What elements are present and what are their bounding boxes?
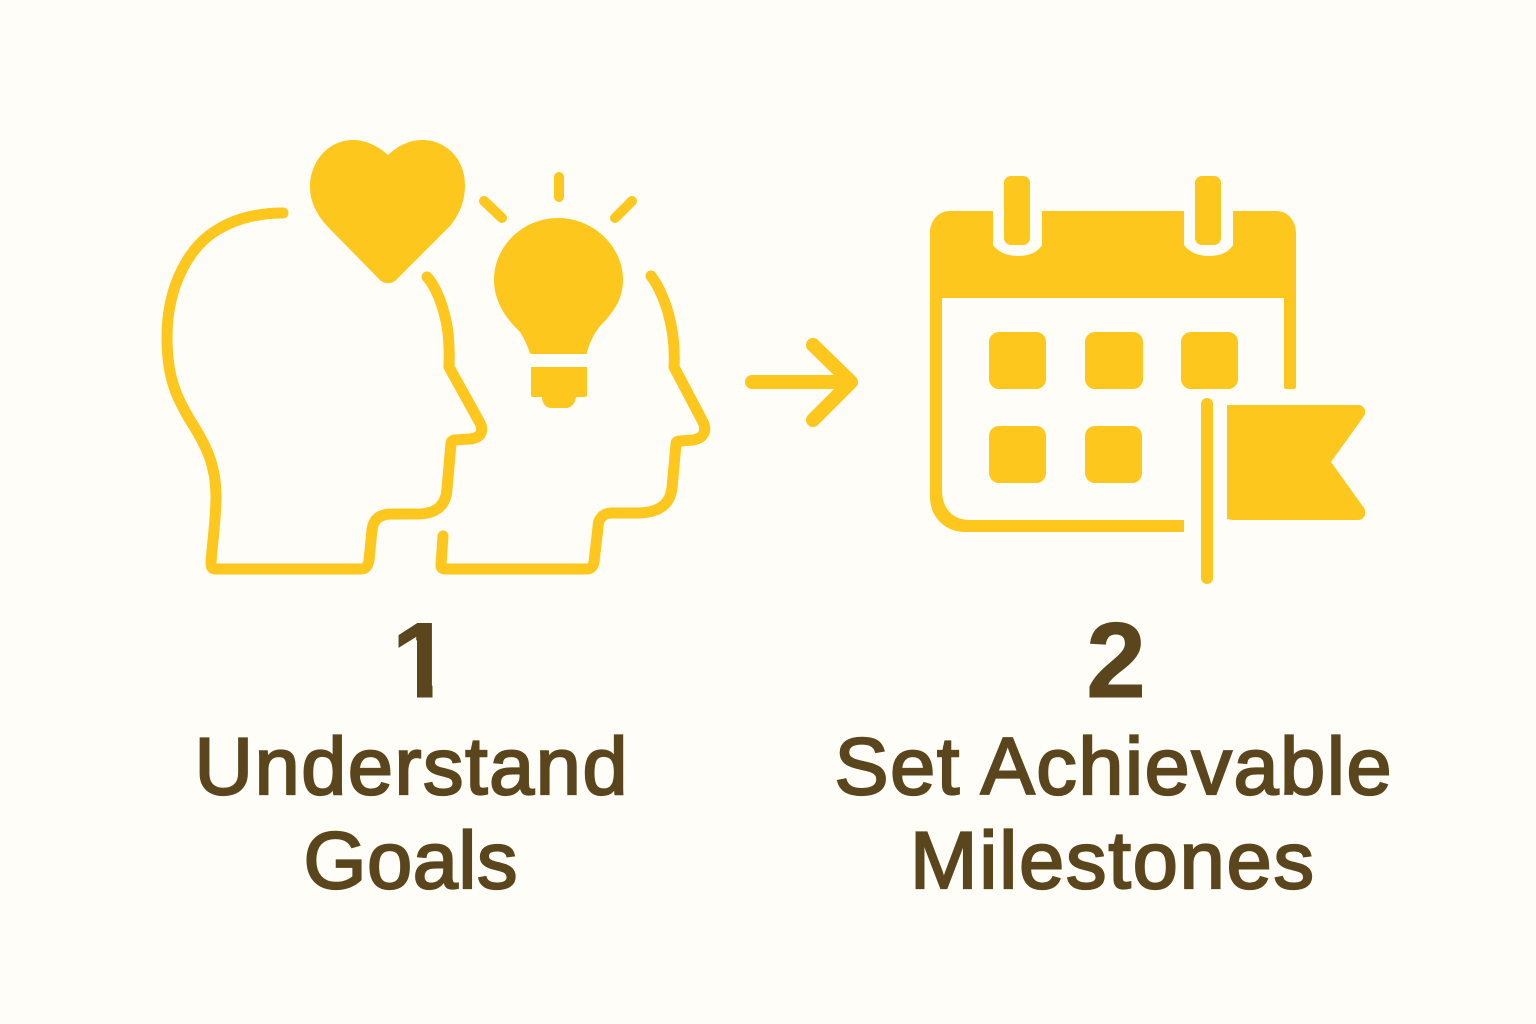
icon: second head outline [441,276,705,569]
calendar binder rings [1004,176,1221,245]
icon: light bulb [494,218,623,408]
step 1 label: Understand [194,722,628,812]
step 2 number: 2 [1086,600,1146,720]
icon: flag [1201,398,1365,584]
step 1 label: Goals [304,816,518,906]
step 2 label [834,722,1392,906]
icon: calendar [930,176,1296,532]
step 1 label [194,722,628,906]
step 2 label: Set Achievable [834,722,1392,812]
step 2 label: Milestones [910,816,1314,906]
calendar body outline [930,290,1296,532]
icon: heart [310,140,465,283]
arrow [752,345,851,420]
icon: first head outline [167,213,482,569]
step 1 number: 1 [392,600,451,720]
calendar date cells [989,332,1238,483]
icon: light bulb rays [484,177,632,218]
calendar header [930,211,1296,298]
